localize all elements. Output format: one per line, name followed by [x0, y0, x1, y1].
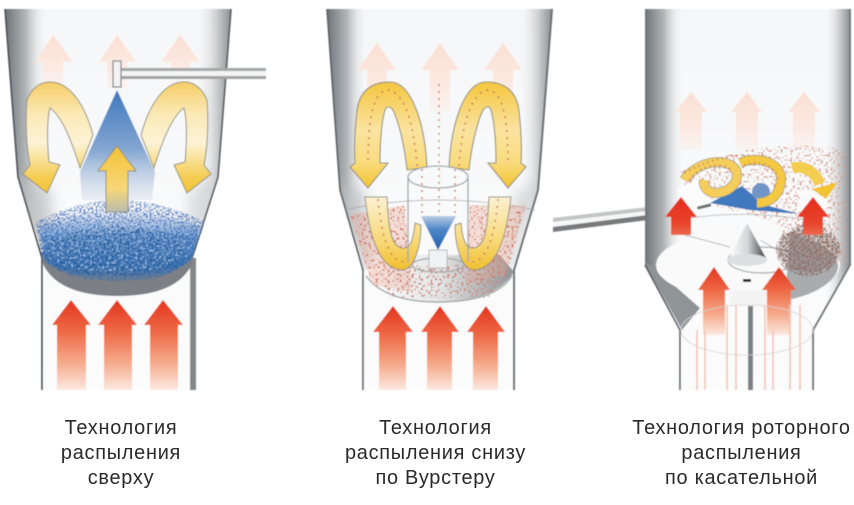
rotor disk — [656, 214, 840, 300]
dotted particle paths 2 — [368, 85, 508, 262]
red particle cloud 2 — [350, 205, 526, 298]
caption: bottom spray Wurster: по Вурстеру — [375, 467, 496, 489]
diagram: bottom spray Wurster technology — [327, 9, 552, 390]
faint outlet arrows 3 — [675, 92, 820, 150]
faint outlet arrows 2 — [358, 43, 522, 112]
diagram: top spray technology — [5, 9, 266, 390]
caption: top spray: распыления — [61, 442, 181, 464]
particle cloud 3 — [680, 146, 848, 276]
red inlet arrows 2 — [373, 306, 505, 390]
caption: rotor tangential spray: по касательной — [665, 467, 818, 489]
Wurster tube top arrows — [350, 82, 526, 188]
caption: rotor tangential spray: Технология роторного — [632, 417, 851, 439]
chamber 3 body — [645, 9, 850, 390]
spray and yellow swirl arrows 3 — [677, 155, 838, 220]
Wurster tube — [408, 166, 468, 272]
chamber 1 body — [5, 9, 231, 390]
side spray pipe 3 — [553, 207, 648, 232]
diagram: rotor tangential spray technology — [553, 9, 850, 390]
nozzle and pipe 1 — [113, 61, 266, 87]
red inlet arrows 1 — [52, 300, 183, 390]
caption: rotor tangential spray: распыления — [681, 442, 802, 464]
left yellow circulation arrow 1 — [23, 82, 93, 193]
chamber 2 body — [327, 9, 552, 390]
right yellow circulation arrow 1 — [141, 82, 211, 193]
spray nozzle and cone 2 — [421, 216, 456, 268]
rotor cone — [727, 223, 767, 306]
Wurster tube lower arrows — [365, 197, 511, 270]
faint outlet arrows 1 — [35, 35, 200, 88]
caption: bottom spray Wurster: Технология — [379, 417, 492, 439]
red arrows 3 — [665, 197, 829, 390]
caption: bottom spray Wurster: распыления снизу — [345, 442, 526, 464]
central yellow arrow 1 — [98, 146, 136, 212]
caption: top spray: Технология — [65, 417, 177, 439]
spray cone 1 — [80, 90, 155, 200]
distribution plate 2 — [344, 200, 535, 302]
particle bed 1 — [36, 200, 205, 296]
caption: top spray: сверху — [88, 467, 154, 489]
